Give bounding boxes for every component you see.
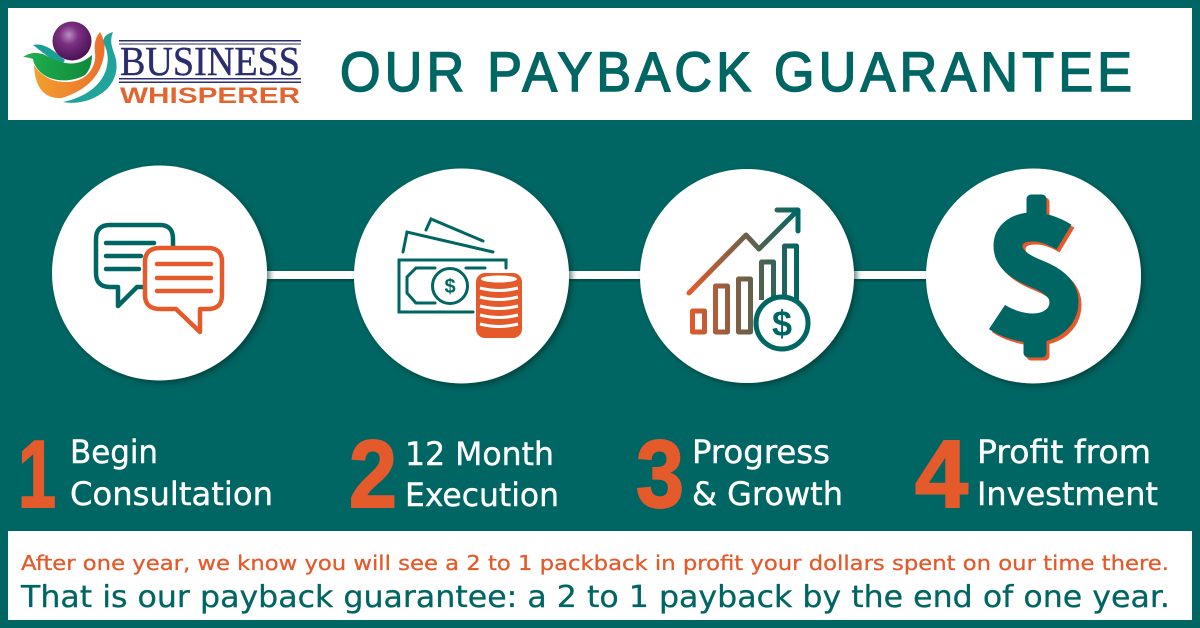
logo sphere [52,22,92,60]
step 4 label: 4 [915,421,968,528]
step 1 label: 1 [18,421,56,528]
footer teal sentence: That is our payback guarantee: a 2 to 1 payback by the end of one year. [20,580,1170,615]
footer orange sentence: After one year, we know you will see a 2 to 1 packback in profit your dollars spent on our time there. [21,551,1169,575]
step 2 label: 2 [349,421,397,528]
icon: bars [692,246,796,332]
step 4 label [915,421,1158,528]
step 4 circle: dollar [926,168,1141,384]
step 3 label [636,421,843,528]
footer panel [8,531,1192,620]
logo word BUSINESS: BUSINESS [120,38,300,84]
step 1 label [18,421,273,528]
connector lines [260,271,932,279]
icon: big dollar sign [997,195,1067,360]
icon: dollar coin [756,297,808,349]
step 2 label: 12 Month [405,435,554,473]
step 2 circle: money [354,168,569,384]
icon: banknotes [399,219,506,312]
step 4 label: Investment [977,475,1158,513]
step 3 label: 3 [636,421,684,528]
icon: trend arrow [689,210,798,293]
step 1 circle: conversation [52,166,267,380]
step 2 label: Execution [405,476,559,514]
logo word WHISPERER: WHISPERER [120,83,300,108]
step 3 circle: growth chart [640,169,854,383]
title: OUR PAYBACK GUARANTEE [340,41,1132,103]
step 2 label [349,421,559,528]
icon: orange speech bubble [145,248,222,332]
icon: dollar coin: $ [772,303,792,344]
step 1 label: Consultation [70,475,273,513]
dollar sign on banknote: $ [444,276,456,298]
icon: coin stack [476,273,522,338]
header panel [8,8,1192,120]
logo rules [119,40,301,83]
logo: Business Whisperer [23,22,301,108]
step 3 label: & Growth [692,475,843,513]
step 3 label: Progress [692,433,830,471]
icon: teal speech bubble [96,225,173,306]
step 4 label: Profit from [977,433,1151,471]
step 1 label: Begin [70,433,158,471]
